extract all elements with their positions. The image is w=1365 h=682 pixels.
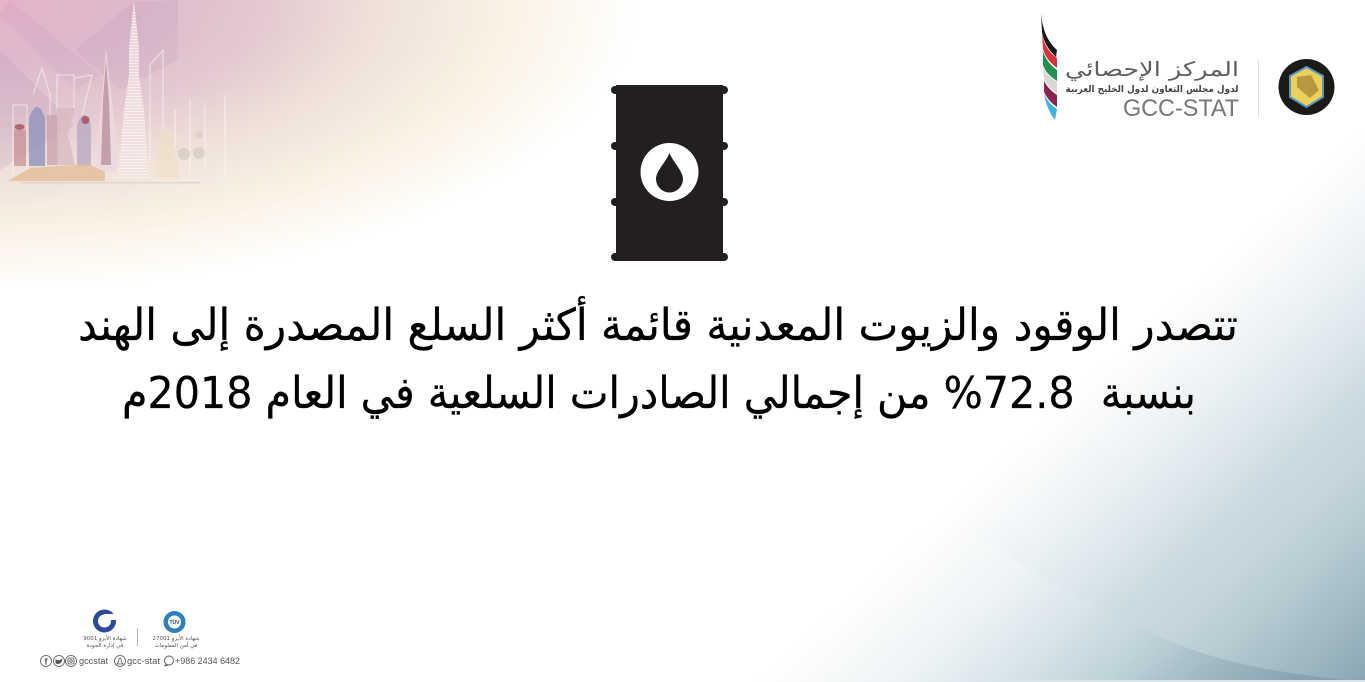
icon: facebook: f <box>44 656 48 666</box>
ISO 27001 caption: في أمن المعلومات <box>155 641 198 649</box>
logo Arabic subtitle: لدول مجلس التعاون لدول الخليج العربية <box>1066 84 1238 95</box>
icon: twitter <box>54 656 64 666</box>
handle gccstat: gccstat <box>79 656 108 667</box>
icon: snapchat <box>114 656 126 666</box>
icon: instagram <box>66 656 76 666</box>
logo Arabic name: المركز الإحصائي <box>1065 57 1239 82</box>
icon: oil barrel <box>611 85 728 261</box>
handle gcc-stat: gcc-stat <box>127 656 160 667</box>
ISO 9001 caption <box>83 634 127 649</box>
logo: GCC emblem <box>1278 59 1334 115</box>
social contact row <box>40 656 240 667</box>
ISO 27001 caption <box>152 634 200 649</box>
certifications <box>83 611 200 649</box>
ISO 27001 caption: شهادة الأيزو 27001 <box>152 634 200 642</box>
logo ribbon stripes <box>1041 13 1057 120</box>
ISO 9001 caption: في إدارة الجودة <box>87 643 124 649</box>
icon: whatsapp <box>164 656 174 666</box>
ISO 9001 caption: شهادة الأيزو 9001 <box>83 634 127 642</box>
phone number: +986 2434 6482 <box>175 656 240 667</box>
icon: TUV 27001 badge: TÜV <box>170 619 180 626</box>
icon: facebook <box>40 656 52 666</box>
logo: GCC-STAT <box>1041 13 1239 122</box>
logo English name: GCC-STAT <box>1123 95 1239 122</box>
headline <box>78 296 1238 419</box>
headline line 2: بنسبة 72.8% من إجمالي الصادرات السلعية في العام 2018م <box>122 368 1196 419</box>
icon: ISO 9001 badge <box>96 612 117 630</box>
headline line 1: تتصدر الوقود والزيوت المعدنية قائمة أكثر السلع المصدرة إلى الهند <box>78 296 1238 351</box>
skyline illustration <box>8 0 225 184</box>
